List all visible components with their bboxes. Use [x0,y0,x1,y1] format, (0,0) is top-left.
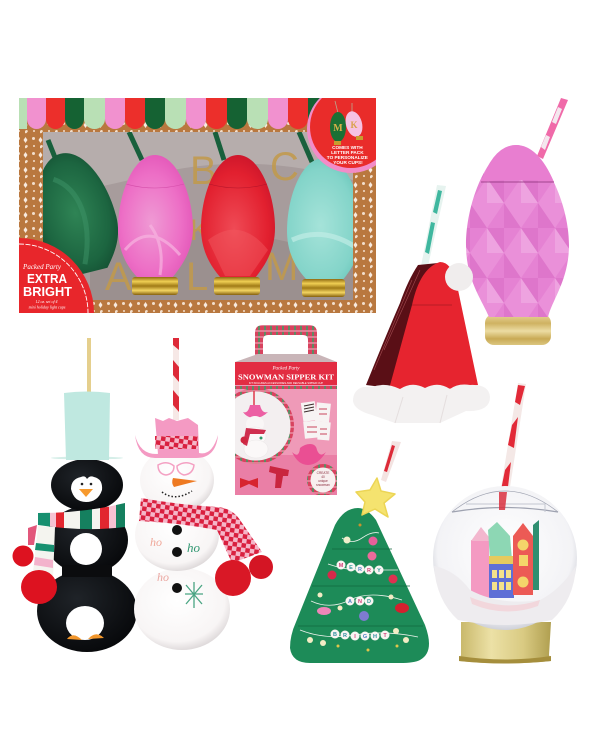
tree body [290,508,429,663]
snowman cup: ho [187,540,200,555]
kit title: SNOWMAN SIPPER KIT [238,372,334,382]
ho ho ho: ho [150,535,162,549]
hat front [389,262,478,390]
bright: G [363,634,367,640]
mini bulbs: K [350,120,358,130]
gold star [356,478,395,517]
badge: extra bright: BRIGHT [23,285,72,299]
merry: R [367,568,371,574]
christmas tree cup [290,441,429,663]
product box: extra bright light cups [19,98,376,313]
gold letters behind cups [105,152,298,290]
and [346,596,374,606]
badge: extra bright: mini holiday light cups [29,304,66,310]
straw in lid [499,492,507,510]
smile [162,491,192,497]
teal top hat [51,392,123,460]
badge: extra bright [19,238,94,313]
bright: H [373,634,377,640]
gold letters behind cups: K [190,214,210,247]
badge: extra bright: Packed Party [22,263,62,271]
carrot nose [172,478,197,487]
and: N [358,599,362,605]
faceted pink bulb cup with straw [466,98,569,345]
red bulb cup [201,155,275,295]
snowman sipper kit box: unique [318,479,328,483]
bright [330,630,390,640]
handle [255,325,317,356]
pink cowboy hat [135,418,218,458]
straw [421,185,446,266]
snowman cup [134,338,273,650]
gold letters behind cups: A [105,255,132,299]
snowman sipper kit box: KIT INCLUDES ACCESSORIES AND REUSABLE SIPPER CUP [249,381,323,385]
red striped straw [173,338,179,420]
snow [434,566,576,625]
knit scarf band [38,503,125,530]
and: D [367,599,371,605]
buttons [172,525,182,535]
green bulb cup [43,153,118,274]
ribbons [48,132,312,162]
merry [336,560,384,574]
penguin cup [12,338,137,652]
box patterned frame [19,98,376,313]
bright: B [333,632,337,638]
badge: extra bright: EXTRA [27,272,67,286]
scarf tail [28,525,55,580]
red pompoms [12,546,34,566]
badge: extra bright: 12 oz. set of 4 [35,299,58,304]
merry: Y [377,568,381,574]
head [140,448,214,512]
pink bulb cup [118,155,193,295]
santa hat cup [353,185,490,423]
gold base [485,314,551,345]
callout text: TO PERSONALIZE [327,155,368,160]
mini bulbs [330,101,365,145]
snowman sipper kit box: 40 [321,475,325,479]
glass globe [433,486,577,630]
and: A [348,599,352,605]
merry: M [339,563,344,569]
callout: comes with letter pack [307,98,376,173]
snowman cup: ho [157,570,169,584]
straw [537,98,568,159]
bottom body [134,568,230,650]
checked scarf [139,498,262,563]
pompoms [249,555,273,579]
scarf graphic [269,466,289,488]
gold base [459,622,551,664]
merry: R [358,567,362,573]
bright: R [343,633,347,639]
bow graphic [240,478,258,488]
glasses [158,463,194,475]
penguin face [71,476,102,502]
head [51,459,123,511]
gold letters behind cups: L [186,255,208,299]
pink hat graphic [292,444,326,465]
awning stripes [19,98,328,129]
white trim [353,384,490,423]
badge [307,464,339,496]
bright: I [354,634,356,640]
snowman sipper kit box: Packed Party [271,366,300,372]
middle body [46,506,128,574]
snowman sipper kit box [235,325,337,495]
snowman sipper kit box: CREATE [317,471,329,475]
ornaments and bulbs [307,524,409,652]
hat side [366,263,438,388]
feet [67,634,104,640]
callout text: YOUR CUPS! [333,160,363,165]
callout text: LETTER PACK [331,150,364,155]
bulb body [466,145,569,317]
header [235,362,337,385]
belly patches [70,533,102,565]
lid [452,491,558,512]
letter sheets [301,401,331,440]
gold letters behind cups: M [265,245,298,289]
bottom body [37,570,137,652]
box body [235,385,337,455]
circle photo [235,389,294,464]
bright: T [383,633,387,639]
straw [381,441,401,482]
light strings [300,533,418,637]
middle body [135,499,219,571]
bamboo straw [87,338,91,392]
callout text: COMES WITH [332,145,363,150]
snowflake [185,582,203,608]
village [471,520,539,604]
gold letters behind cups: C [270,145,299,189]
pompom [445,263,473,291]
gold letters behind cups: B [190,149,217,193]
snow globe cup [433,383,577,664]
merry: E [349,565,353,571]
waist fill [62,565,112,577]
snowman sipper kit box: snowman [316,483,330,487]
striped straw [499,383,526,500]
mini bulbs: M [333,123,343,134]
teal bulb cup [287,158,353,297]
box window [23,132,362,300]
mini snowman [240,391,268,458]
lid [235,354,337,362]
